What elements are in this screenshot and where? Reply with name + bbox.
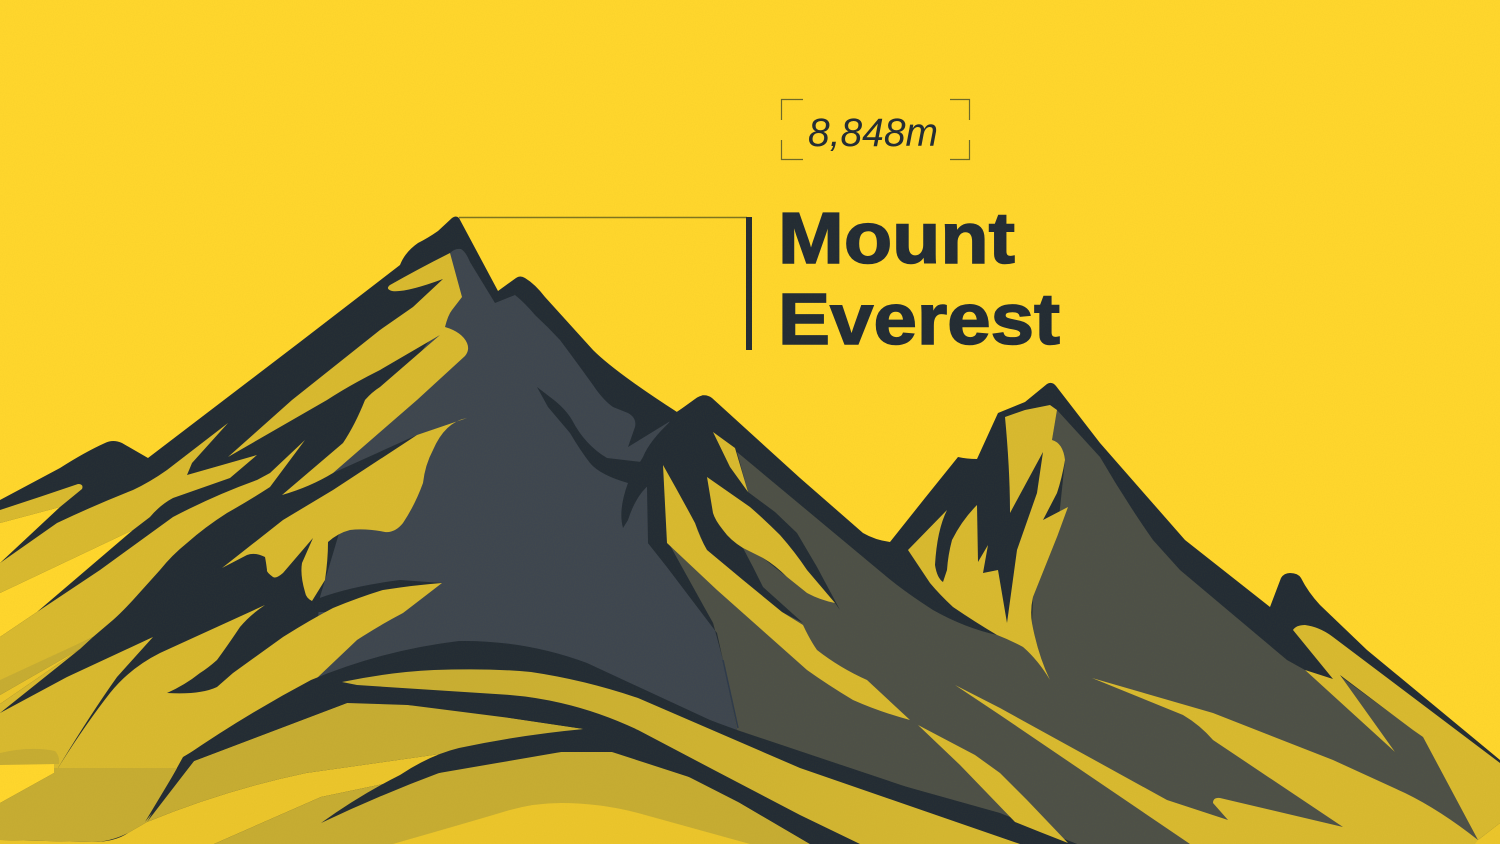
- snow stripes on central peak: [663, 432, 910, 720]
- shadow crack on main peak: [537, 387, 650, 528]
- yellow gap: left tip: [0, 507, 60, 563]
- shaded hillside under first arm: [147, 703, 584, 822]
- snow patch: main lower slope: [58, 583, 442, 822]
- snow stripe between arcs: [342, 669, 1020, 844]
- snow spike lower centre: [918, 725, 1068, 843]
- snow patch on second peak: [908, 405, 1068, 680]
- mountain range illustration: [0, 216, 1500, 844]
- bright strip under mid ridge: [0, 649, 80, 704]
- middle stripe: [707, 477, 835, 603]
- blue-grey rock face of main peak: [311, 249, 737, 730]
- snow patch on far right ridge: [1293, 625, 1500, 840]
- shadow wedges on main peak: [282, 435, 417, 495]
- snow patch: far left tip: [0, 484, 82, 523]
- snow patch: left upper ridge: [0, 423, 257, 593]
- foreground dark arcs: [145, 641, 1077, 844]
- leader vertical bar: [746, 217, 752, 350]
- title: [778, 199, 1060, 360]
- long stripe: [663, 465, 910, 720]
- small stripe: [713, 432, 748, 492]
- snow stripes lower right: [955, 678, 1478, 844]
- snow patch: upper main peak: [228, 253, 468, 495]
- dark arms of central peak: [648, 395, 840, 660]
- snow patch: left mid ridge: [0, 440, 305, 682]
- shaded mound far left: [0, 749, 59, 765]
- snow strip above dark spike: [0, 649, 80, 713]
- title line 2: Everest: [778, 280, 1060, 360]
- corner brackets: [782, 100, 970, 160]
- thin blue edge between faces: [723, 660, 738, 728]
- height label with corner brackets: [782, 100, 970, 160]
- yellow gap: left ridge: [0, 530, 133, 637]
- olive rock face of right peaks: [660, 410, 1478, 844]
- shaded ground lower left: [0, 768, 177, 842]
- snow patch: main peak shoulder: [222, 418, 467, 601]
- shaded hillside under second arm: [214, 752, 810, 844]
- bright corner lower right: [1475, 823, 1500, 844]
- height value: 8,848m: [808, 111, 938, 155]
- shaded strip under mid ridge: [0, 637, 93, 695]
- bright foreground band: [0, 752, 454, 844]
- bright patch far left: [0, 764, 54, 803]
- snow patch: lower left slope: [0, 637, 153, 768]
- bright foreground mound: [393, 803, 750, 844]
- title line 1: Mount: [778, 199, 1015, 279]
- mountain silhouette: [0, 216, 1500, 844]
- peak leader line: [459, 216, 747, 218]
